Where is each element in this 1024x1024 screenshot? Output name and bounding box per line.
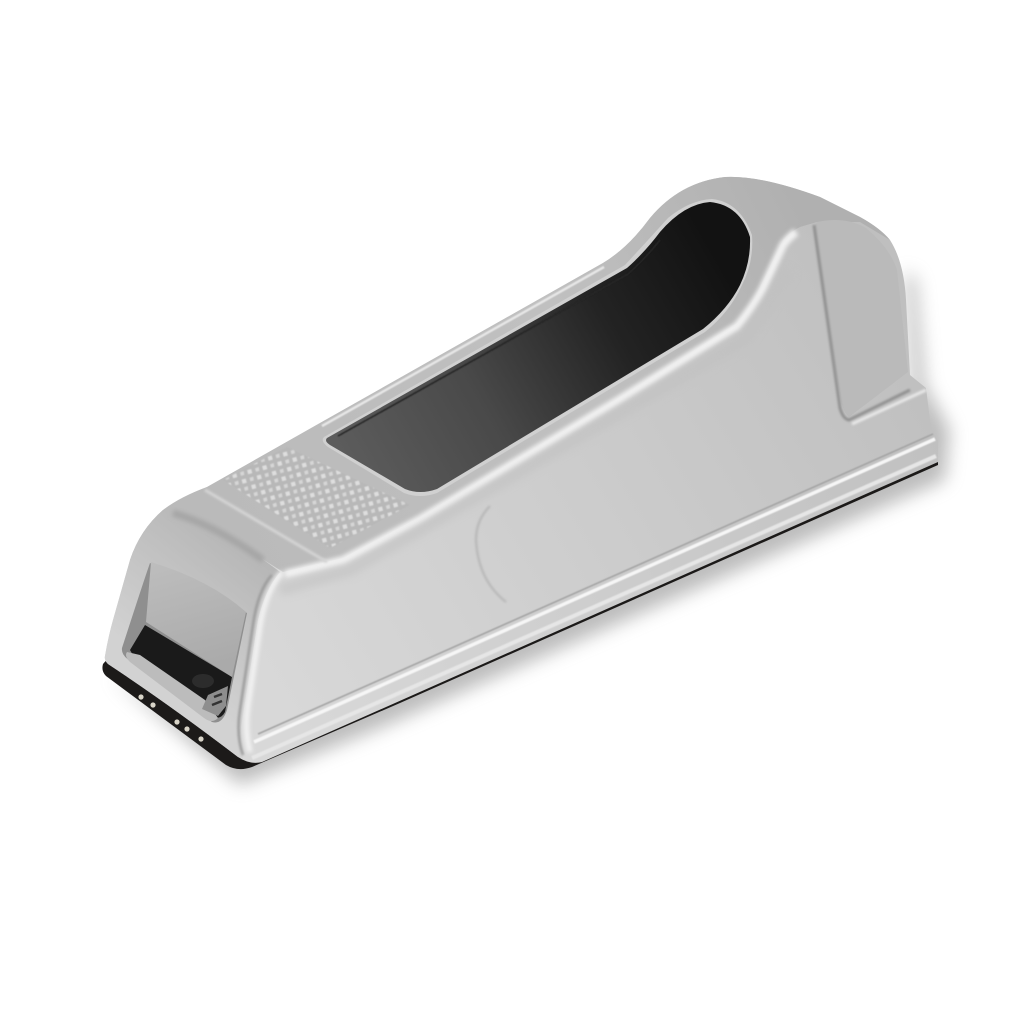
drop shadow (110, 270, 950, 785)
front corner ridge (239, 575, 272, 755)
rear panel shadow edge (814, 225, 910, 420)
rear grip panel (814, 220, 908, 417)
front opening (122, 563, 247, 722)
rear step highlight (852, 390, 926, 424)
side ridge soft highlight (285, 232, 796, 574)
black sanding base (102, 460, 938, 769)
lower side rib (258, 434, 933, 734)
plane body silhouette (105, 177, 938, 763)
dark blade cavity (130, 625, 232, 718)
front flap (146, 562, 246, 677)
window interior (326, 202, 750, 492)
top edge rim highlight (322, 267, 604, 426)
front face (105, 510, 280, 758)
front corner highlight (246, 572, 282, 752)
rivet studs (138, 694, 204, 742)
interior top wall line (338, 240, 660, 436)
blade screw (192, 674, 228, 716)
bottom edge light strip (252, 456, 936, 758)
side oval panel edge (476, 506, 506, 602)
knurled grip pad (223, 447, 410, 548)
lower side rib highlight (254, 439, 935, 742)
opening lower lip (126, 652, 218, 721)
front shoulder light band (205, 490, 327, 562)
window rim (323, 199, 752, 496)
side face soft shade below ridge (280, 270, 790, 590)
front shoulder crease (173, 513, 263, 560)
top deck surface (130, 177, 890, 572)
